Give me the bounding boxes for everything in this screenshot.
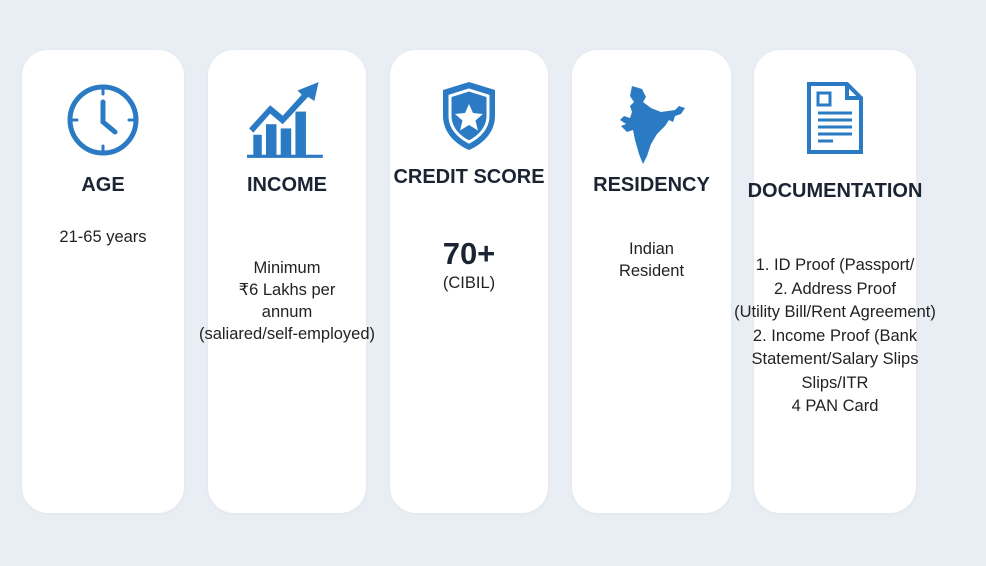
text: document list: 2. Income Proof (Bank: [753, 326, 917, 344]
text: document list: 4 PAN Card: [792, 397, 878, 415]
heading: age: AGE: [81, 174, 125, 196]
text: residency requirement: [619, 240, 684, 280]
text: residency requirement: Indian: [629, 240, 674, 258]
heading: residency: RESIDENCY: [593, 174, 710, 196]
icon: shield: [443, 82, 495, 150]
text: income requirement: Minimum: [254, 259, 320, 277]
text: document list: (Utility Bill/Rent Agreement): [734, 303, 936, 321]
text: income requirement: [199, 259, 375, 343]
panel: age: [22, 50, 184, 513]
panel: income: [208, 50, 366, 513]
text: document list: Statement/Salary Slips: [752, 350, 918, 368]
text: income requirement: annum: [262, 303, 312, 321]
panel: residency: [572, 50, 731, 513]
text: age range: 21-65 years: [59, 228, 147, 246]
text: document list: [734, 256, 936, 415]
panel: credit score: [390, 50, 548, 513]
text: document list: Slips/ITR: [802, 374, 868, 392]
text: CIBIL: (CIBIL): [443, 274, 495, 292]
text: document list: 2. Address Proof: [774, 280, 896, 298]
icon: india map: [620, 86, 685, 164]
heading: credit score: CREDIT SCORE: [393, 166, 545, 188]
text: residency requirement: Resident: [619, 262, 684, 280]
icon: document: [807, 82, 863, 154]
heading: income: INCOME: [247, 174, 327, 196]
icon: clock: [68, 84, 138, 156]
text: document list: 1. ID Proof (Passport/: [756, 256, 914, 274]
text: score value: 70+: [443, 236, 495, 271]
text: income requirement: (saliared/self-employed): [199, 325, 375, 343]
heading: documentation: DOCUMENTATION: [748, 180, 922, 202]
text: income requirement: ₹6 Lakhs per: [239, 281, 335, 299]
icon: growth chart: [247, 82, 323, 158]
panel: documentation: [754, 50, 916, 513]
